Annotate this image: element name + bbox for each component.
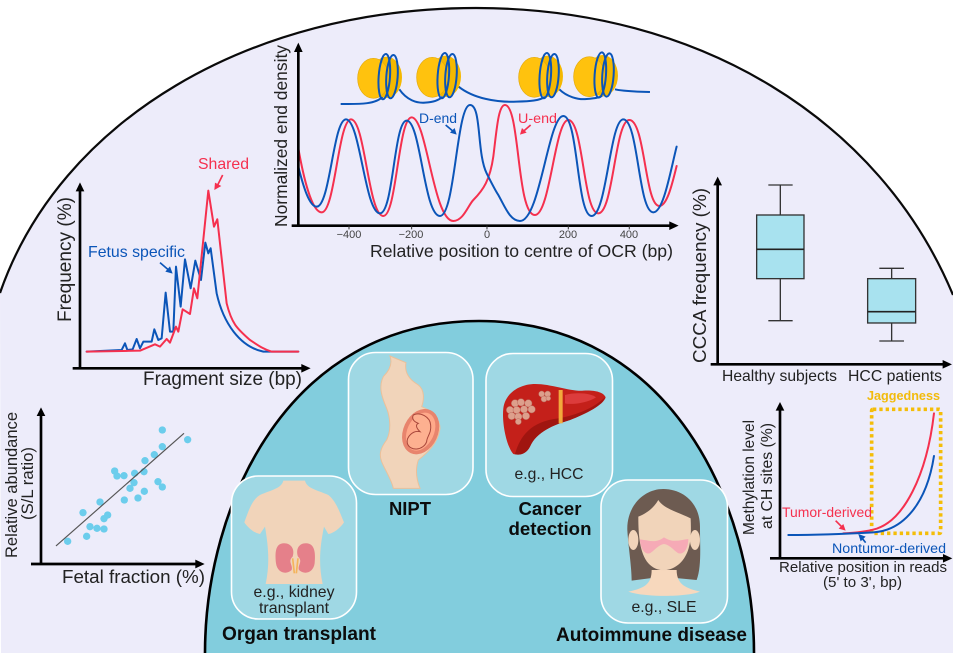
panel: methylation jaggedness chart: Nontumor-derived	[832, 541, 946, 557]
axis labels: Relative abundance	[3, 412, 21, 558]
panel: end density chart	[271, 43, 679, 261]
trend line	[56, 433, 184, 546]
tick labels: 400	[620, 229, 638, 241]
text: e.g., kidney: e.g., kidney	[254, 584, 335, 601]
tick labels	[337, 229, 638, 241]
panel: scatter plot	[3, 407, 205, 587]
icon: torso with kidneys	[244, 481, 344, 584]
panel: CCCA box plot: Healthy subjects	[722, 368, 837, 385]
panel: methylation jaggedness chart: at CH sites (%)	[759, 423, 776, 529]
outer dome outline	[0, 8, 953, 295]
card: autoimmune disease	[601, 480, 728, 623]
heading: NIPT: NIPT	[389, 498, 432, 519]
data points	[64, 426, 191, 545]
tick labels: 0	[484, 229, 490, 241]
tick labels: −400	[337, 229, 361, 241]
nucleosomes and DNA	[341, 52, 650, 104]
D-end and U-end density curves	[298, 105, 677, 221]
text: e.g., SLE: e.g., SLE	[632, 599, 696, 616]
fragment size distributions	[73, 175, 311, 373]
panel: CCCA box plot	[689, 177, 952, 385]
panel: fragment size chart: Fetus specific	[88, 244, 185, 261]
axis labels: Methylation level	[741, 420, 758, 535]
tick labels: −200	[399, 229, 423, 241]
curve labels: Shared	[198, 156, 249, 173]
panel: CCCA box plot: HCC patients	[848, 368, 942, 385]
axes	[292, 43, 679, 230]
axis labels: Frequency (%)	[55, 197, 76, 322]
card: NIPT	[348, 352, 473, 494]
heading: cancer: Cancer	[518, 498, 582, 519]
heading: autoimmune disease: Autoimmune disease	[556, 625, 747, 646]
heading: detection: detection	[508, 518, 592, 539]
panel: scatter plot: Fetal fraction (%)	[62, 566, 205, 587]
card: cancer detection	[486, 354, 612, 496]
panel: clinical applications dome	[205, 321, 754, 653]
tick labels: 200	[559, 229, 577, 241]
panel: methylation jaggedness chart	[741, 389, 952, 591]
box: HCC patients	[868, 268, 916, 341]
icon: pregnant body	[380, 356, 446, 488]
axis labels: CCCA frequency (%)	[689, 188, 710, 363]
panel: fragment size chart	[55, 156, 311, 390]
panel: fragment size chart: Fragment size (bp)	[143, 369, 302, 390]
panel: methylation jaggedness chart: Relative position in reads	[779, 559, 947, 576]
text: transplant: transplant	[259, 600, 330, 617]
box: healthy subjects	[757, 185, 804, 321]
panel: end density chart: U-end	[518, 110, 557, 126]
panel: methylation jaggedness chart: Tumor-derived	[782, 505, 872, 520]
card: organ transplant	[232, 476, 356, 619]
axis labels: Normalized end density	[271, 45, 291, 227]
icon: liver with tumours	[503, 384, 606, 455]
curve labels: D-end	[419, 110, 457, 126]
icon: face with butterfly rash	[627, 489, 700, 596]
curve labels: Jaggedness	[867, 389, 940, 403]
panel: methylation jaggedness chart: (5' to 3', bp)	[823, 574, 902, 591]
panel: end density chart: Relative position to centre of OCR (bp)	[370, 241, 673, 261]
heading: organ transplant: Organ transplant	[222, 624, 377, 645]
jaggedness dotted box	[872, 409, 941, 533]
text: e.g., HCC: e.g., HCC	[514, 466, 584, 483]
panel: scatter plot: (S/L ratio)	[19, 447, 37, 520]
